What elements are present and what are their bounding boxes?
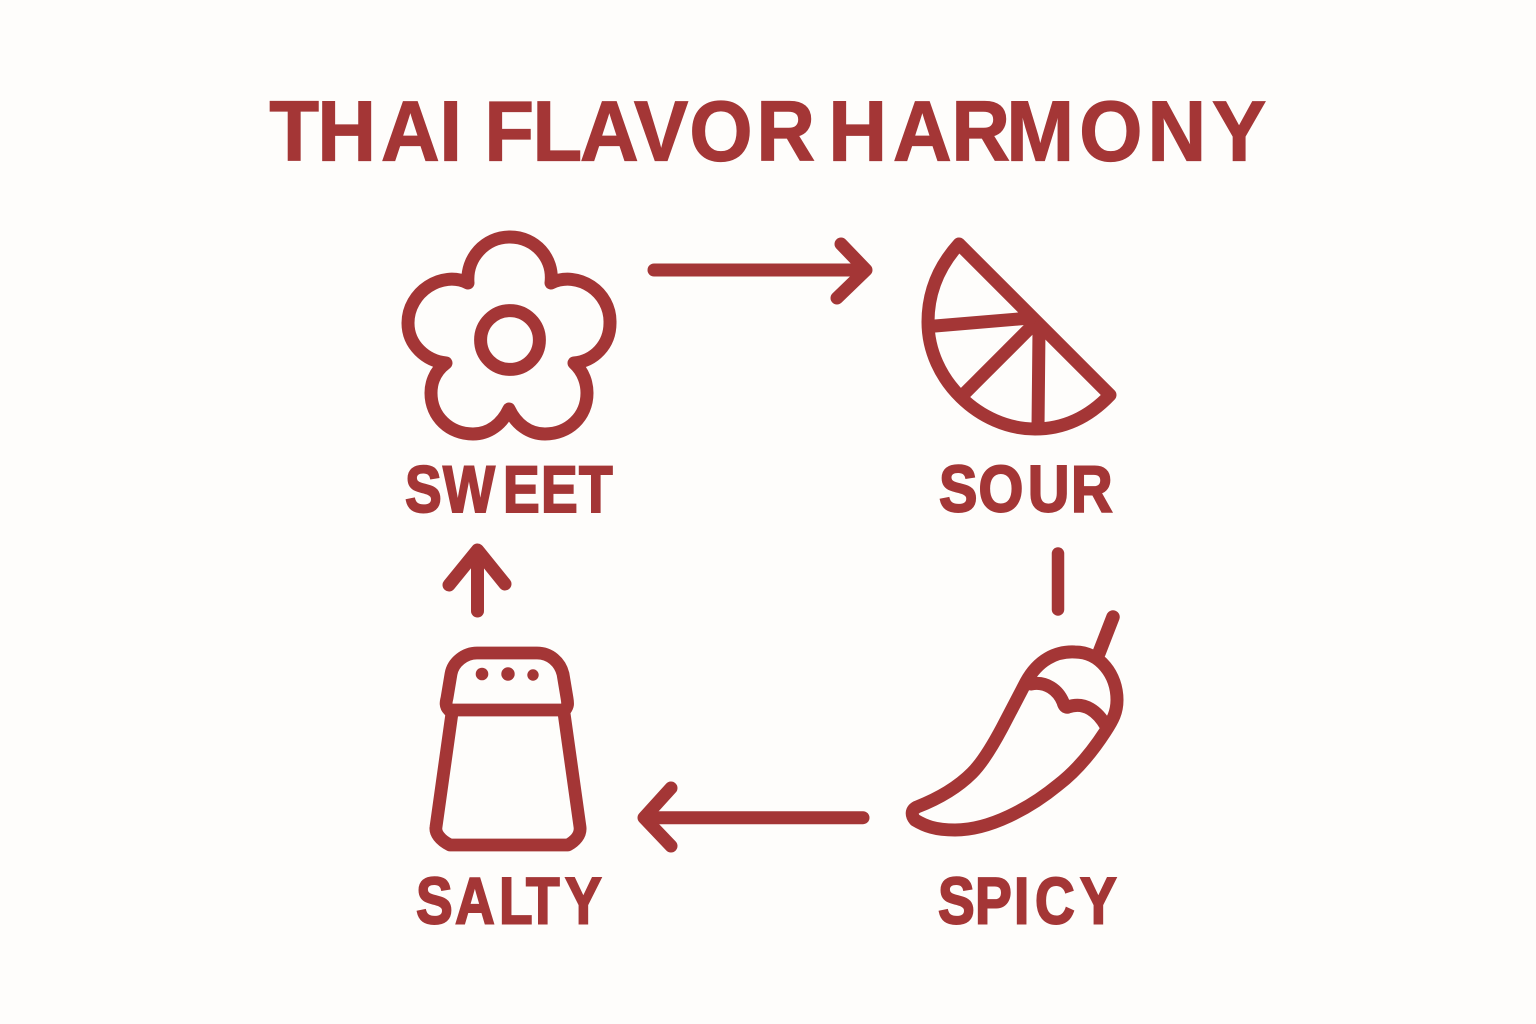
- arrow: sour to spicy: [1052, 554, 1064, 610]
- arrow: sweet to sour: [654, 244, 866, 298]
- arrow: salty to sweet: [449, 550, 505, 611]
- title: THAI FLAVOR HARMONY: [269, 84, 1266, 179]
- icon: salt shaker (salty): [436, 653, 580, 845]
- icon: chili (spicy): [912, 617, 1117, 830]
- icon: shaker holes: [476, 667, 539, 681]
- icon: flower (sweet): [408, 237, 610, 434]
- icon: lime wedge (sour): [928, 244, 1110, 429]
- label: sweet: SWEET: [405, 452, 613, 526]
- arrow: spicy to salty: [644, 788, 863, 846]
- label: salty: SALTY: [416, 864, 602, 938]
- label: sour: SOUR: [939, 453, 1113, 526]
- label: spicy: SPICY: [938, 864, 1117, 938]
